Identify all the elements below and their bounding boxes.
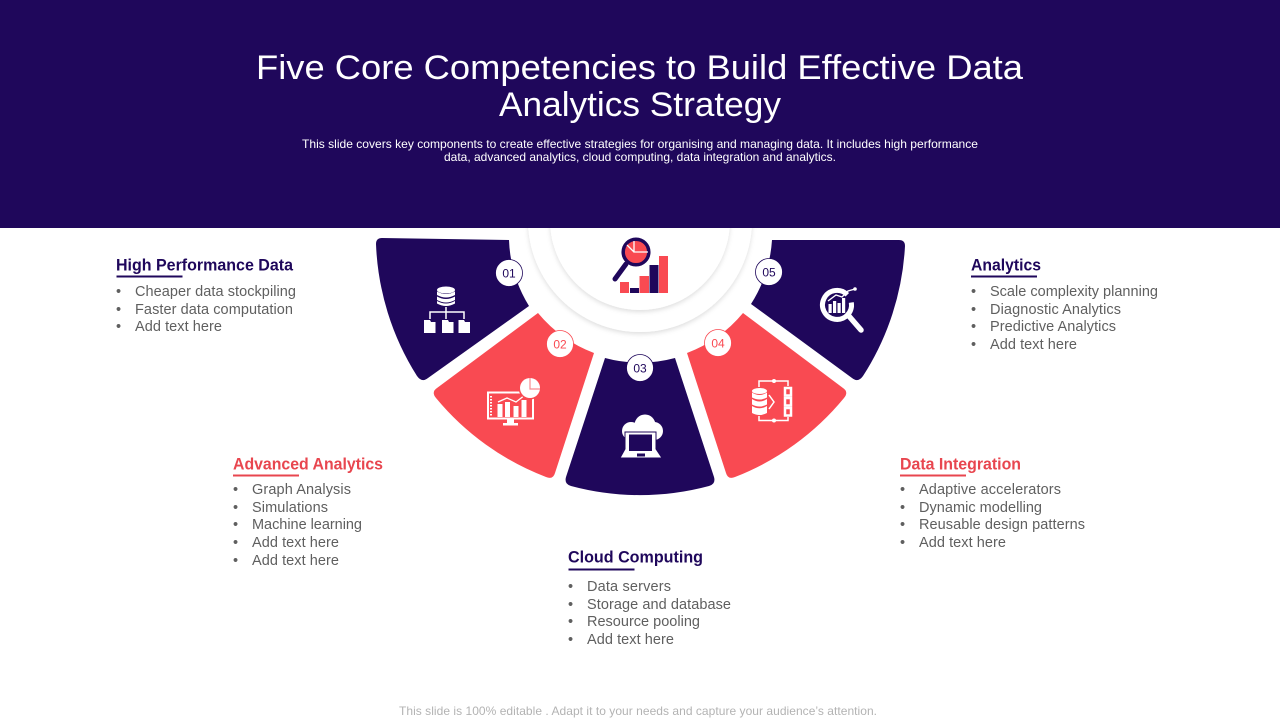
subtitle: This slide covers key components to create effective strategies for organising and managing data. It includes high performance [302,137,978,151]
badge 03: 03 [633,362,647,376]
badge 03 [626,354,654,382]
segment 04: data integration [687,313,846,478]
text block: cloud computing: • [568,614,573,630]
badge 04 [704,330,732,356]
badge 01: 01 [502,266,516,280]
title: Five Core Competencies to Build Effective Data [256,49,1023,87]
icon: database hierarchy [424,286,470,333]
title [256,49,1023,124]
text block: analytics: Add text here [990,337,1077,353]
icon: analytics magnifier [823,287,861,330]
text block: data integration: Add text here [919,535,1006,551]
badge 01 [496,260,522,286]
segment 03: cloud computing [566,358,714,495]
text block: advanced analytics: Add text here [252,535,339,551]
text block: analytics: Predictive Analytics [990,319,1116,335]
subtitle: data, advanced analytics, cloud computing, data integration and analytics. [444,150,836,164]
text block: advanced analytics: • [233,482,238,498]
icon: data integration flow [752,379,791,422]
text block: high performance data [116,256,296,335]
text block: cloud computing: Cloud Computing [568,548,703,566]
text block: analytics: Scale complexity planning [990,284,1158,300]
text block: advanced analytics: Add text here [252,553,339,569]
text block: analytics: • [971,337,976,353]
text block: advanced analytics [233,456,383,569]
text block: cloud computing: • [568,597,573,613]
text block: data integration: • [900,482,905,498]
text block: cloud computing: Resource pooling [587,614,700,630]
footer note: This slide is 100% editable . Adapt it to your needs and capture your audience’s attention. [399,704,877,718]
segment 01: high performance data [376,238,529,380]
text block: analytics [971,256,1158,353]
text block: cloud computing: • [568,632,573,648]
title: Analytics Strategy [499,86,781,124]
text block: advanced analytics: Graph Analysis [252,482,351,498]
text block: cloud computing: • [568,579,573,595]
subtitle [302,137,978,164]
text block: high performance data: Cheaper data stockpiling [135,284,296,300]
text block: high performance data: High Performance Data [116,256,294,274]
text block: data integration: • [900,500,905,516]
text block: data integration: Adaptive accelerators [919,482,1061,498]
text block: advanced analytics: Machine learning [252,517,362,533]
text block: high performance data: Add text here [135,319,222,335]
segment 02: advanced analytics [434,313,594,478]
text block: data integration: • [900,517,905,533]
text block: data integration: Dynamic modelling [919,500,1042,516]
text block: cloud computing [568,548,731,648]
text block: data integration: Reusable design patterns [919,517,1085,533]
text block: cloud computing: Data servers [587,579,671,595]
text block: analytics: Analytics [971,256,1041,274]
text block: cloud computing: Add text here [587,632,674,648]
text block: analytics: • [971,319,976,335]
text block: advanced analytics: • [233,500,238,516]
text block: advanced analytics: Simulations [252,500,328,516]
header band [0,0,1280,228]
center rings [528,108,752,332]
icon: monitor with chart and pie [488,376,542,426]
text block: data integration: Data Integration [900,456,1021,474]
icon: cloud laptop [620,414,663,458]
text block: advanced analytics: • [233,517,238,533]
text block: analytics: • [971,302,976,318]
badge 05: 05 [762,266,776,280]
text block: analytics: Diagnostic Analytics [990,302,1121,318]
text block: high performance data: • [116,284,121,300]
text block: high performance data: • [116,319,121,335]
badge 02 [546,330,574,358]
badge 05 [756,258,782,286]
badge 04: 04 [711,336,725,350]
segment 05: analytics [751,240,905,380]
text block: advanced analytics: Advanced Analytics [233,456,383,474]
text block: cloud computing: Storage and database [587,597,731,613]
text block: data integration [900,456,1085,551]
text block: analytics: • [971,284,976,300]
icon: report magnifier and bars [615,239,668,293]
text block: advanced analytics: • [233,535,238,551]
badge 02: 02 [553,338,567,352]
text block: data integration: • [900,535,905,551]
text block: high performance data: • [116,302,121,318]
text block: advanced analytics: • [233,553,238,569]
text block: high performance data: Faster data computation [135,302,293,318]
